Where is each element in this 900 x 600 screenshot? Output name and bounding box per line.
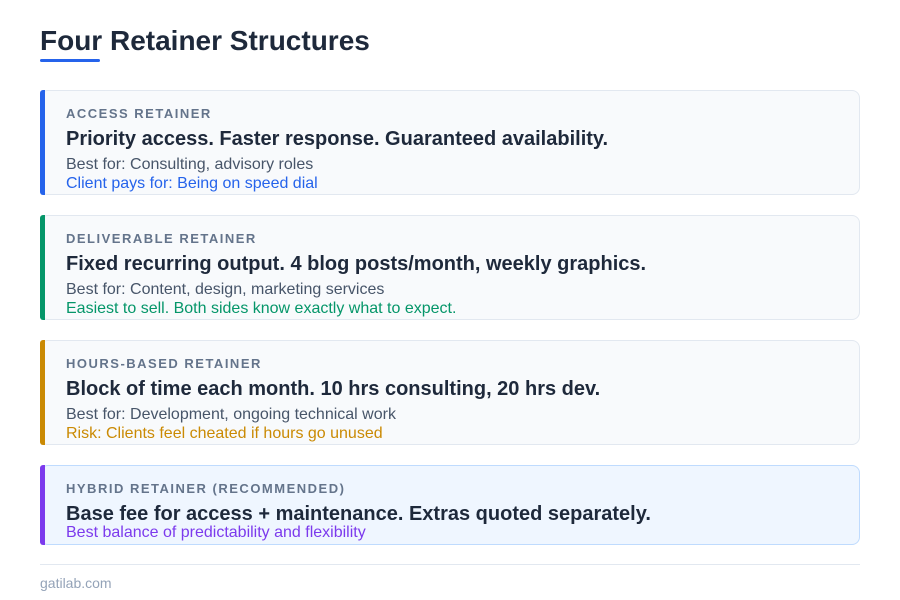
note: Risk: Clients feel cheated if hours go unused bbox=[66, 425, 383, 442]
panel: hybrid retainer bbox=[40, 465, 860, 545]
note: Client pays for: Being on speed dial bbox=[66, 175, 318, 192]
headline: Fixed recurring output. 4 blog posts/month, weekly graphics. bbox=[66, 253, 646, 275]
title: Four Retainer Structures bbox=[40, 25, 370, 56]
best for: Best for: Development, ongoing technical work bbox=[66, 406, 396, 423]
note: Best balance of predictability and flexibility bbox=[66, 524, 366, 541]
label: HYBRID RETAINER (RECOMMENDED) bbox=[66, 481, 345, 496]
best for: Best for: Consulting, advisory roles bbox=[66, 156, 313, 173]
headline: Base fee for access + maintenance. Extras quoted separately. bbox=[66, 503, 651, 525]
label: ACCESS RETAINER bbox=[66, 106, 212, 121]
panel: hours-based retainer bbox=[40, 340, 860, 445]
headline: Priority access. Faster response. Guaranteed availability. bbox=[66, 128, 608, 150]
best for: Best for: Content, design, marketing services bbox=[66, 281, 384, 298]
headline: Block of time each month. 10 hrs consulting, 20 hrs dev. bbox=[66, 378, 600, 400]
panel: deliverable retainer bbox=[40, 215, 860, 320]
note: Easiest to sell. Both sides know exactly what to expect. bbox=[66, 300, 456, 317]
footer: gatilab.com bbox=[40, 575, 112, 591]
panel: access retainer bbox=[40, 90, 860, 195]
label: HOURS-BASED RETAINER bbox=[66, 356, 262, 371]
label: DELIVERABLE RETAINER bbox=[66, 231, 257, 246]
